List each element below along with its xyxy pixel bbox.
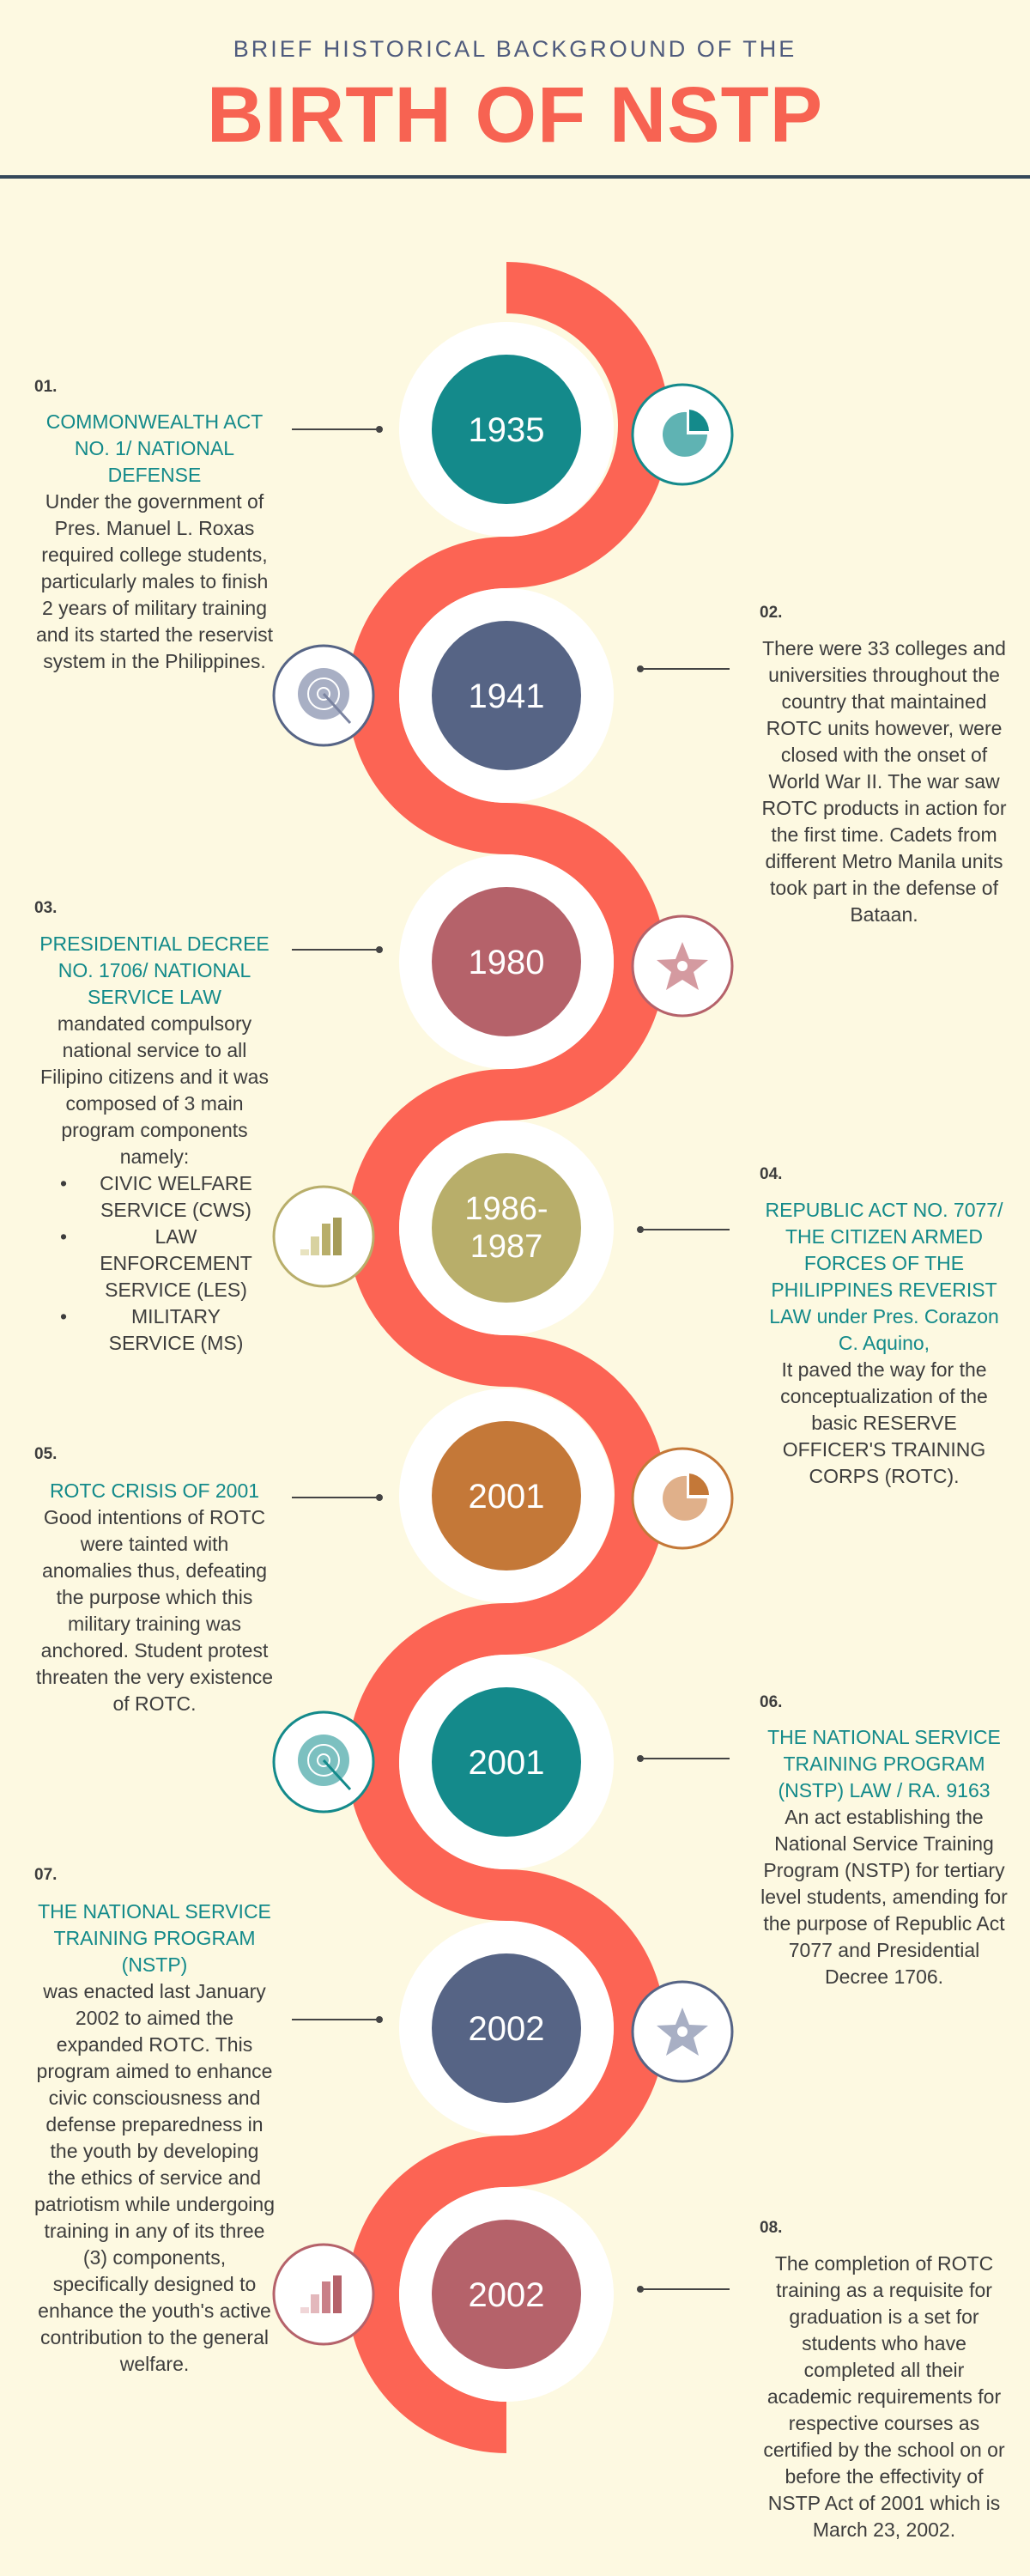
year 2001 a bbox=[399, 1388, 614, 1603]
snake band bbox=[373, 288, 644, 2427]
item 03: MILITARY SERVICE (MS) bbox=[109, 1305, 243, 1354]
icon: bars 1986 bbox=[274, 1187, 373, 1286]
icon: star 1980 bbox=[633, 916, 732, 1016]
year 1986-1987 bbox=[399, 1121, 614, 1335]
icon: target 2001 bbox=[274, 1712, 373, 1812]
icon: pie 2001 bbox=[633, 1449, 732, 1548]
year 1986-1987: 1986- bbox=[464, 1191, 548, 1227]
year 1986-1987: 1987 bbox=[470, 1229, 542, 1265]
item 06 bbox=[760, 1693, 1008, 1988]
icon: pie 1935 bbox=[633, 385, 732, 484]
item 02: There were 33 colleges and universities throughout the country that maintained ROTC units however, were closed with the onset of World War II. The war saw ROTC products in action for the first time. Cadets from different Metro Manila units took part in the defense of Bataan. bbox=[761, 637, 1007, 926]
item 06: THE NATIONAL SERVICE TRAINING PROGRAM (NSTP) LAW / RA. 9163 bbox=[767, 1726, 1001, 1801]
year 1980 bbox=[399, 854, 614, 1069]
item 02: 02. bbox=[760, 604, 782, 622]
year 1941: 1941 bbox=[469, 677, 544, 715]
item 03: PRESIDENTIAL DECREE NO. 1706/ NATIONAL SERVICE LAW bbox=[39, 933, 270, 1008]
item 05: ROTC CRISIS OF 2001 bbox=[50, 1479, 259, 1502]
item 03 bbox=[34, 899, 270, 1354]
item 04: It paved the way for the conceptualization of the basic RESERVE OFFICER'S TRAINING CORPS (ROTC). bbox=[780, 1358, 988, 1487]
year 2001 b: 2001 bbox=[469, 1744, 544, 1782]
item 06: 06. bbox=[760, 1693, 782, 1711]
year 2001 b bbox=[399, 1655, 614, 1869]
icon: star 2002 bbox=[633, 1982, 732, 2081]
item 07: THE NATIONAL SERVICE TRAINING PROGRAM (NSTP) bbox=[38, 1900, 271, 1976]
item 04: 04. bbox=[760, 1165, 782, 1183]
year 2001 a: 2001 bbox=[469, 1478, 544, 1516]
item 08: 08. bbox=[760, 2219, 782, 2237]
year 1941 bbox=[399, 588, 614, 803]
year 2002 b bbox=[399, 2187, 614, 2402]
subtitle: BRIEF HISTORICAL BACKGROUND OF THE bbox=[233, 36, 797, 62]
item 01: COMMONWEALTH ACT NO. 1/ NATIONAL DEFENSE bbox=[46, 410, 263, 486]
item 05: Good intentions of ROTC were tainted with anomalies thus, defeating the purpose which this military training was anchored. Student protest threaten the very existence of ROTC. bbox=[36, 1506, 273, 1715]
item 01 bbox=[34, 378, 273, 672]
item 08: The completion of ROTC training as a requisite for graduation is a set for students who have completed all their academic requirements for respective courses as certified by the school on or before the effectivity of NSTP Act of 2001 which is March 23, 2002. bbox=[763, 2252, 1005, 2541]
item 04 bbox=[760, 1165, 1003, 1487]
item 05: 05. bbox=[34, 1445, 57, 1463]
item 04: REPUBLIC ACT NO. 7077/ THE CITIZEN ARMED FORCES OF THE PHILIPPINES REVERIST LAW under Pres. Corazon C. Aquino, bbox=[766, 1199, 1003, 1354]
item 03: mandated compulsory national service to all Filipino citizens and it was composed of 3 main program components namely: bbox=[40, 1012, 269, 1168]
item 01: Under the government of Pres. Manuel L. Roxas required college students, particularly males to finish 2 years of military training and its started the reservist system in the Philippines. bbox=[36, 490, 273, 672]
item 01: 01. bbox=[34, 378, 57, 396]
year 1935: 1935 bbox=[469, 411, 544, 449]
item 06: An act establishing the National Service Training Program (NSTP) for tertiary level students, amending for the purpose of Republic Act 7077 and Presidential Decree 1706. bbox=[760, 1806, 1008, 1988]
item 07: 07. bbox=[34, 1866, 57, 1884]
item 03: LAW ENFORCEMENT SERVICE (LES) bbox=[100, 1225, 252, 1301]
year 2002 a bbox=[399, 1921, 614, 2136]
year 2002 b: 2002 bbox=[469, 2276, 544, 2314]
arrows bbox=[292, 427, 730, 2292]
year 1935 bbox=[399, 322, 614, 537]
item 03: 03. bbox=[34, 899, 57, 917]
title: BIRTH OF NSTP bbox=[207, 71, 823, 159]
year 1980: 1980 bbox=[469, 944, 544, 981]
icon: target 1941 bbox=[274, 646, 373, 745]
item 03: CIVIC WELFARE SERVICE (CWS) bbox=[100, 1172, 252, 1221]
icon: bars 2002 bbox=[274, 2245, 373, 2344]
item 07: was enacted last January 2002 to aimed the expanded ROTC. This program aimed to enhance civic consciousness and defense preparedness in the youth by developing the ethics of service and patriotism while undergoing training in any of its three (3) components, specifically designed to enhance the youth's active contribution to the general welfare. bbox=[34, 1980, 275, 2375]
year 2002 a: 2002 bbox=[469, 2010, 544, 2048]
